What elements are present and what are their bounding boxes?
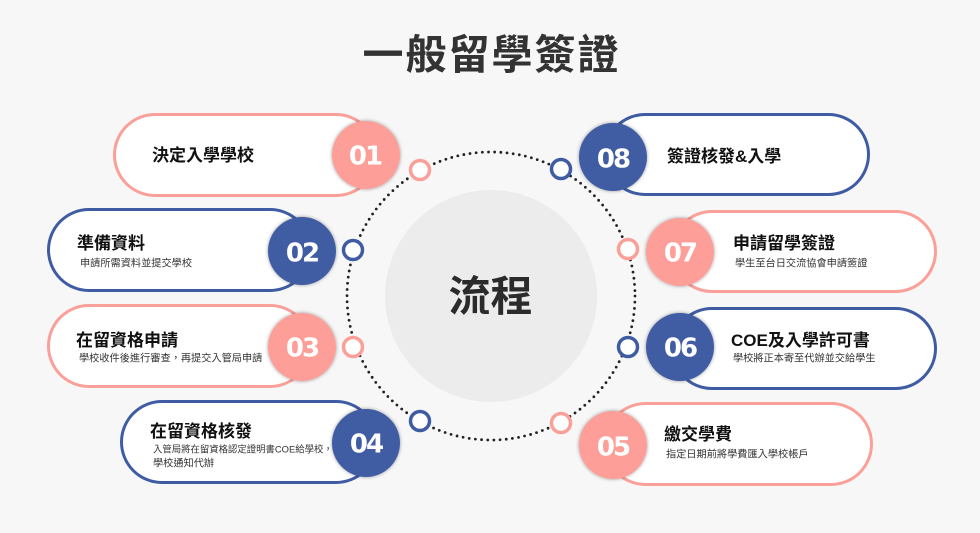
step 03: 03 [286,334,319,364]
step 04: 在留資格核發 [150,421,252,441]
step 02: 申請所需資料並提交學校 [80,256,192,270]
step 05: 指定日期前將學費匯入學校帳戶 [666,448,809,460]
step 03 [48,306,336,386]
step 07 [646,212,936,292]
step 07: 學生至台日交流協會申請簽證 [735,256,867,270]
step 03: 學校收件後進行審查，再提交入管局申請 [79,352,262,364]
title: 一般留學簽證 [362,32,620,78]
step 08: 08 [597,144,630,174]
step 04: 入管局將在留資格認定證明書COE給學校， [153,444,333,454]
center label: 流程 [448,273,533,320]
step 03: 在留資格申請 [76,330,178,350]
step 07: 申請留學簽證 [733,233,835,253]
step 01: 決定入學學校 [152,145,254,165]
step 06: 06 [664,334,697,364]
step 05: 05 [597,432,630,462]
step 02: 02 [286,238,318,268]
step 04 [122,402,400,482]
step 02 [48,210,336,290]
step 04: 04 [350,430,383,460]
step 05: 繳交學費 [664,424,732,444]
step 05 [579,404,872,484]
step 08: 簽證核發&入學 [667,146,781,166]
step 04: 學校通知代辦 [153,456,214,470]
step 01 [114,114,400,196]
step 06: COE及入學許可書 [731,330,870,350]
step 08 [579,114,868,194]
step 06: 學校將正本寄至代辦並交給學生 [733,352,876,364]
step 07: 07 [664,238,697,268]
dotted ring [347,152,635,440]
step 06 [646,308,936,388]
step 02: 準備資料 [77,233,145,253]
center hub circle [385,190,597,402]
ring nodes [344,160,638,432]
step 01: 01 [349,142,382,172]
